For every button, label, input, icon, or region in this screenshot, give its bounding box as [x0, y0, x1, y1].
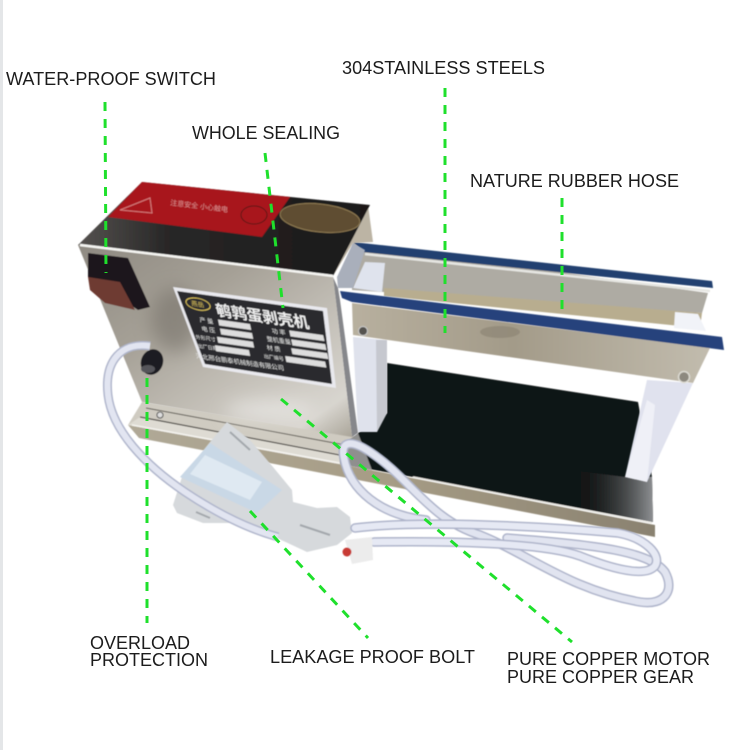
stainless steel control box [78, 182, 373, 437]
callout line: overload protection [146, 378, 148, 623]
label: pure copper motor and gear: PURE COPPER GEAR [507, 667, 694, 687]
box side panel [333, 205, 373, 437]
label: pure copper motor and gear [507, 649, 710, 687]
label: pure copper motor and gear: PURE COPPER MOTOR [507, 649, 710, 669]
front rail with blue rubber hose [340, 291, 724, 383]
cable loops [343, 444, 669, 603]
rear blue rubber hose [353, 242, 713, 288]
box front face [78, 245, 352, 437]
nameplate: 整机重量 [266, 335, 292, 346]
label: overload protection [90, 633, 208, 670]
nameplate: 燕岳 [190, 299, 205, 309]
callout line: leakage proof bolt [250, 511, 368, 638]
icon: overload protection knob [137, 346, 167, 378]
label: overload protection: OVERLOAD [90, 633, 190, 653]
rear rail and white supports [352, 242, 713, 482]
label: overload protection: PROTECTION [90, 650, 208, 670]
label: 304 stainless steels: 304STAINLESS STEELS [342, 58, 545, 78]
callout line: nature rubber hose [560, 198, 564, 313]
right upper white block [674, 312, 706, 331]
nameplate [173, 287, 336, 388]
black plate surface [340, 363, 653, 523]
box lid [78, 182, 370, 276]
nameplate: 产 量 [199, 316, 214, 326]
callout line: pure copper motor and gear [281, 399, 572, 642]
nameplate: 河北邢台鹏泰机械制造有限公司 [195, 351, 285, 372]
left cable [107, 345, 278, 537]
left upper white block [353, 262, 385, 292]
label: water-proof switch: WATER-PROOF SWITCH [6, 69, 216, 89]
label: leakage proof bolt: LEAKAGE PROOF BOLT [270, 647, 475, 667]
nameplate: 功 率 [271, 327, 286, 337]
icon: water-proof switch [88, 253, 150, 310]
label: nature rubber hose: NATURE RUBBER HOSE [470, 171, 679, 191]
plug cable label [342, 537, 373, 564]
plug in bubble wrap [173, 422, 352, 552]
callout line: whole sealing [265, 153, 283, 308]
nameplate: 电 压 [201, 325, 216, 335]
callout line: water-proof switch [105, 102, 106, 273]
red warning panel [108, 182, 290, 237]
nameplate: 出厂编号 [263, 353, 285, 363]
power cable and wrapped plug [107, 345, 669, 603]
right white post [625, 380, 693, 482]
nameplate: 出厂日期 [197, 343, 218, 352]
left white post [353, 337, 387, 432]
machine base plate [128, 363, 655, 537]
red warning panel: 注意安全 小心触电 [170, 198, 228, 214]
nameplate: 鹌鹑蛋剥壳机 [214, 301, 311, 332]
label: whole sealing: WHOLE SEALING [192, 123, 340, 143]
round brass seal [279, 200, 361, 236]
callout line: 304 stainless steels [444, 88, 446, 333]
nameplate: 外形尺寸 [195, 334, 216, 343]
nameplate: 材 质 [266, 344, 281, 353]
